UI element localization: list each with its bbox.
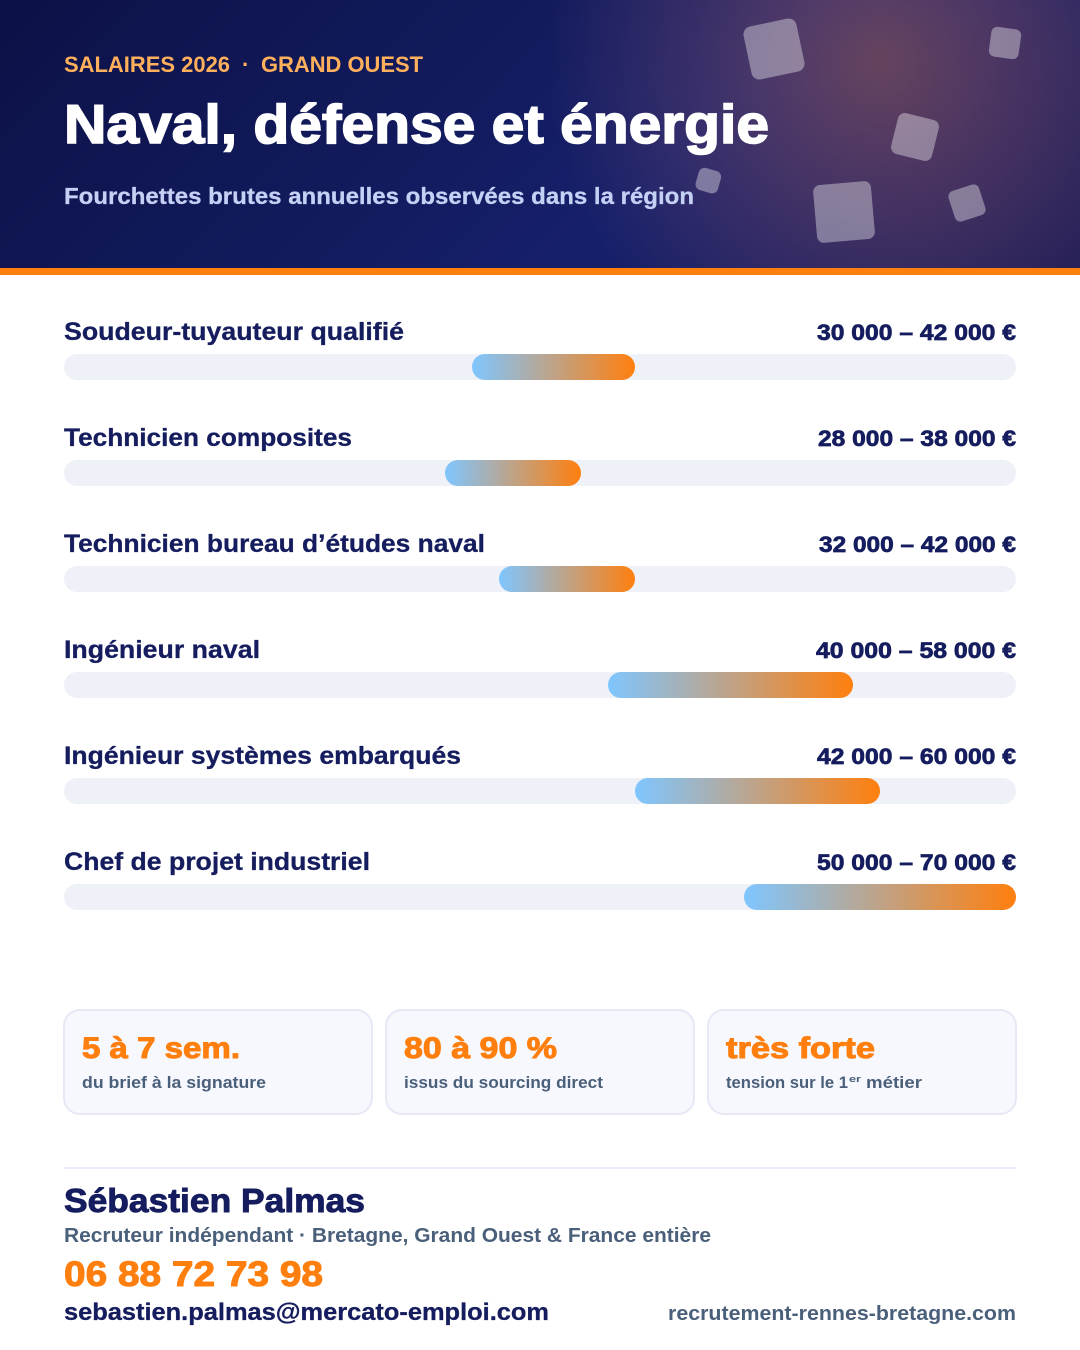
stat card: tension: [708, 1010, 1016, 1114]
row: Ingénieur systèmes embarqués: Ingénieur systèmes embarqués: [64, 742, 461, 770]
footer contact block: [64, 1182, 1016, 1326]
stat card: tension: tension sur le 1: [726, 1073, 848, 1092]
eyebrow: ·: [242, 52, 249, 77]
eyebrow: SALAIRES 2026: [64, 52, 230, 77]
row: Ingénieur naval: 40 000 – 58 000 €: [816, 638, 1017, 663]
row: Ingénieur naval: Ingénieur naval: [64, 636, 260, 664]
panel: header banner: [0, 0, 1080, 275]
row: Technicien composites: 28 000 – 38 000 €: [818, 426, 1017, 451]
decorative squares: [694, 17, 1022, 243]
row: Soudeur-tuyauteur qualifié: Soudeur-tuyauteur qualifié: [64, 318, 404, 346]
eyebrow: GRAND OUEST: [261, 52, 424, 77]
row: Ingénieur systèmes embarqués: [64, 742, 1017, 804]
title: Naval, défense et énergie: [64, 93, 769, 155]
phone: 06 88 72 73 98: [64, 1255, 323, 1294]
row: Technicien composites: [64, 424, 1017, 486]
row: Chef de projet industriel: Chef de projet industriel: [64, 848, 370, 876]
website: recrutement-rennes-bretagne.com: [668, 1302, 1016, 1325]
row: Technicien bureau d'études naval: Technicien bureau d’études naval: [64, 530, 485, 558]
stat card: tension: er: [849, 1074, 862, 1084]
row: Soudeur-tuyauteur qualifié: 30 000 – 42 000 €: [817, 320, 1017, 345]
stat card: délai: du brief à la signature: [82, 1073, 266, 1092]
row: Technicien bureau d'études naval: [64, 530, 1017, 592]
stat card: tension: très forte: [726, 1032, 875, 1065]
stat card: tension: métier: [866, 1073, 922, 1092]
row: Soudeur-tuyauteur qualifié: [64, 318, 1017, 380]
row: Chef de projet industriel: [64, 848, 1017, 910]
row: Technicien bureau d'études naval: 32 000 – 42 000 €: [819, 532, 1017, 557]
name: Sébastien Palmas: [64, 1182, 365, 1219]
eyebrow: [64, 52, 424, 77]
role: Recruteur indépendant · Bretagne, Grand Ouest & France entière: [64, 1224, 711, 1247]
row: Ingénieur systèmes embarqués: 42 000 – 60 000 €: [817, 744, 1017, 769]
stat card: sourcing: 80 à 90 %: [404, 1032, 557, 1065]
row: Ingénieur naval: [64, 636, 1017, 698]
stat card: délai: 5 à 7 sem.: [82, 1032, 240, 1065]
row: Technicien composites: Technicien composites: [64, 424, 352, 452]
orange divider bar: [0, 268, 1080, 275]
stat card: sourcing: [386, 1010, 694, 1114]
row: Chef de projet industriel: 50 000 – 70 000 €: [817, 850, 1017, 875]
subtitle: Fourchettes brutes annuelles observées dans la région: [64, 183, 694, 209]
stat card: sourcing: issus du sourcing direct: [404, 1073, 603, 1092]
stat card: délai: [64, 1010, 372, 1114]
email: sebastien.palmas@mercato-emploi.com: [64, 1299, 549, 1326]
